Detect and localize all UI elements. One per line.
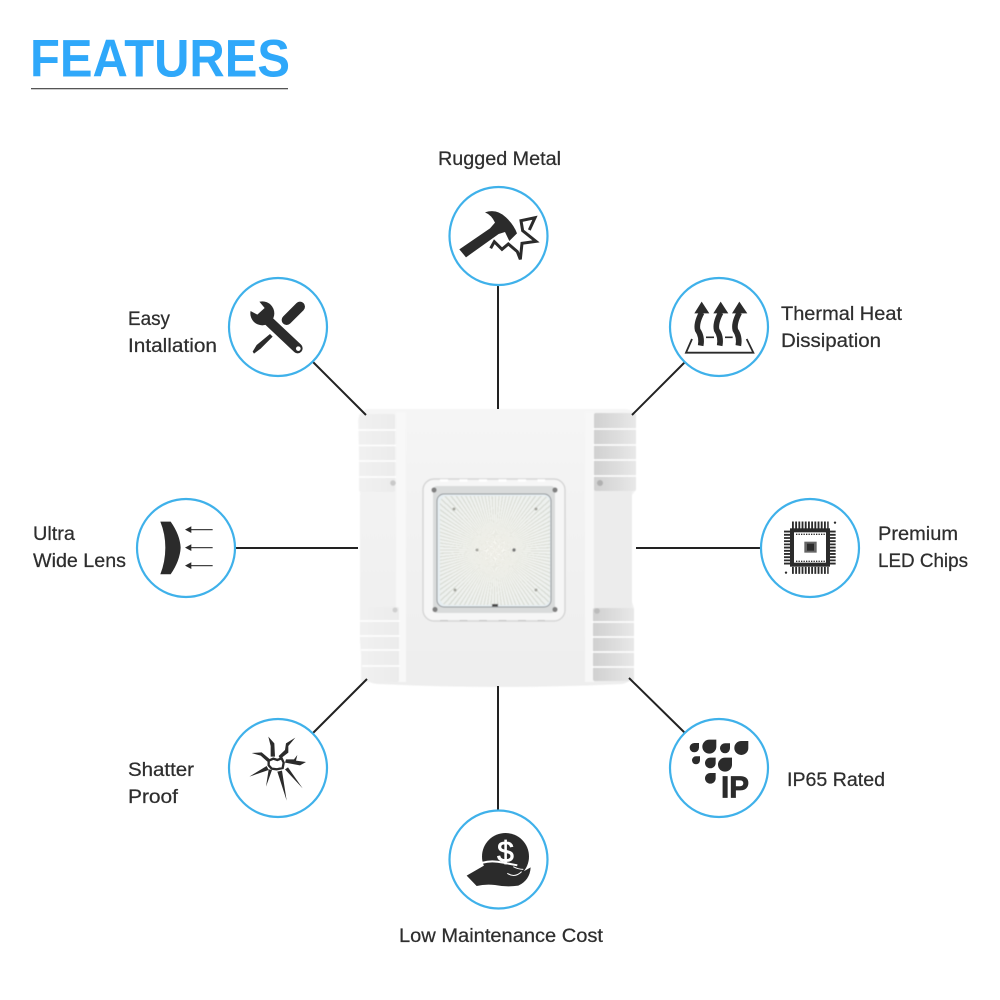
icon: heat arrows: [686, 302, 753, 353]
item: ultra wide lens: Wide Lens: [33, 550, 126, 572]
LED board screws: [452, 508, 538, 606]
icon: lens with arrows: [160, 522, 213, 574]
fins: top left: [356, 414, 396, 492]
LED board: [440, 496, 550, 605]
item: premium LED chips: [761, 499, 968, 597]
item: thermal heat dissipation: Dissipation: [781, 330, 881, 352]
item: rugged metal: Rugged Metal: [438, 148, 561, 170]
icon: water drops with IP: IP: [721, 770, 749, 804]
item: premium LED chips: LED Chips: [878, 550, 968, 572]
item: IP65 rated: IP65 Rated: [787, 769, 885, 791]
item: rugged metal: [438, 148, 561, 285]
icon: hand holding dollar coin: [465, 833, 531, 886]
item: shatter proof: Shatter: [128, 759, 195, 781]
icon: water drops with IP: [690, 740, 749, 804]
fins: top right: [593, 413, 637, 491]
fins: bottom left: [360, 607, 400, 682]
lens frame: [423, 479, 565, 621]
item: shatter proof: Proof: [128, 786, 179, 808]
item: easy installation: Easy: [128, 308, 170, 330]
item: low maintenance cost: Low Maintenance Cost: [399, 925, 604, 947]
icon: hammer striking: [459, 211, 536, 259]
item: ultra wide lens: Ultra: [33, 523, 75, 545]
item: premium LED chips: Premium: [878, 523, 958, 545]
icon: hand holding dollar coin: $: [497, 836, 514, 869]
icon: cracked glass: [249, 737, 306, 801]
item: easy installation: [128, 278, 327, 376]
fins: bottom right: [592, 608, 635, 681]
item: IP65 rated: [670, 719, 885, 817]
item: easy installation: Intallation: [128, 335, 217, 357]
item: shatter proof: [128, 719, 327, 817]
title: FEATURES: [30, 30, 290, 88]
connector lines: [236, 285, 761, 810]
item: low maintenance cost: [399, 810, 604, 947]
item: thermal heat dissipation: Thermal Heat: [781, 303, 903, 325]
product: canopy light fixture: [356, 409, 637, 687]
icon: LED chip: [785, 521, 836, 574]
item: ultra wide lens: [33, 499, 235, 597]
item: thermal heat dissipation: [670, 278, 903, 376]
icon: wrench and screwdriver: [247, 300, 301, 354]
